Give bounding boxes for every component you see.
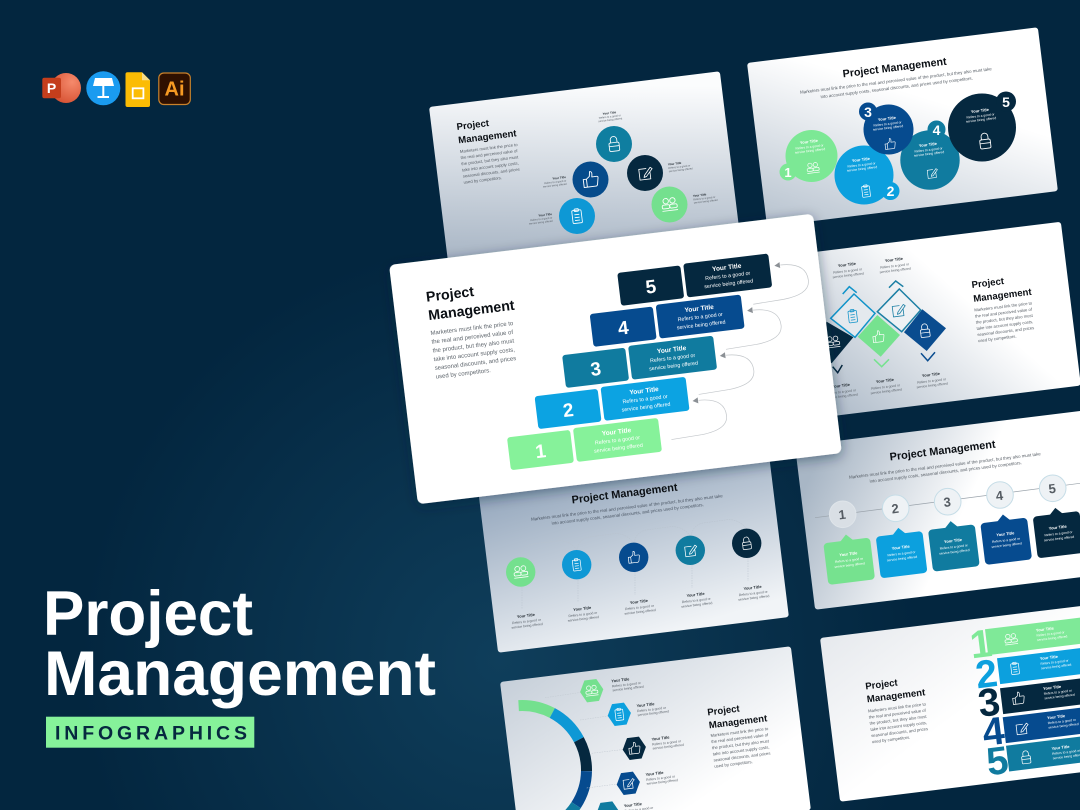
bubble 3: service being offered (873, 124, 904, 132)
step 3: Refers to a good or (650, 353, 696, 364)
circle: lock (732, 529, 761, 558)
callout card 4: Refers to a good or (992, 536, 1021, 544)
bar 1: Your Title (1036, 625, 1055, 633)
timeline line (815, 483, 1080, 518)
bubble 1: Your Title (800, 138, 819, 145)
heading: main slide: Management (427, 298, 516, 324)
text block: slide F: take into account supply costs, (712, 745, 770, 756)
heading: slide C (971, 273, 1033, 305)
step 1: service being offered (594, 443, 643, 455)
text block: slide B: Marketers must link the price to the real and perceived value of the product, but they also must take (800, 66, 992, 95)
step 3: service being offered (649, 361, 698, 372)
icon: Google Slides (126, 72, 150, 107)
labels: slide E: Refers to a good or (512, 618, 542, 625)
bar 2: Refers to a good or (1040, 658, 1070, 666)
bar 1: Refers to a good or (1036, 630, 1066, 638)
step 3: Your Title (657, 345, 687, 355)
text block: slide C: the product, but they also must (976, 313, 1034, 325)
badge: infographics (46, 717, 254, 748)
circle: edit (627, 155, 663, 191)
circle: lock (596, 126, 632, 162)
labels: slide C: Your Title (876, 377, 895, 384)
text block: main slide: take into account supply costs, (433, 347, 516, 363)
labels: slide F: service being offered (652, 743, 684, 751)
panel: five circles slide (478, 453, 789, 653)
bubble 1 (780, 130, 838, 182)
text block: slide A: used by competitors. (463, 175, 502, 185)
labels: slide F (611, 675, 684, 810)
bar 5 (984, 730, 1080, 784)
step 1: Your Title (602, 427, 632, 438)
step 5: Refers to a good or (705, 271, 751, 282)
labels: slide F: Your Title (651, 734, 671, 742)
dashed connectors (521, 520, 748, 609)
labels: slide A: Refers to a good or (530, 215, 553, 222)
bubble 3: Refers to a good or (873, 120, 903, 128)
panel: bubbles slide top right (747, 27, 1058, 227)
bubble 1: service being offered (795, 147, 826, 155)
labels: slide A: Refers to a good or (599, 113, 621, 120)
bubble 5: 5 (1002, 94, 1010, 110)
heading: slide A: Management (458, 128, 518, 146)
labels: slide C: service being offered (832, 272, 864, 279)
labels: slide C: service being offered (826, 393, 858, 400)
step 2: service being offered (621, 402, 671, 414)
bar 4: service being offered (1048, 722, 1079, 730)
icon: Illustrator: Ai (164, 78, 184, 100)
labels: slide E: Refers to a good or (625, 604, 655, 611)
text block: slide A (460, 142, 522, 185)
callout card 3 (927, 518, 980, 572)
step numbers: 5 (1048, 481, 1057, 496)
labels: slide A: Your Title (693, 192, 707, 198)
heading: slide F: Management (708, 713, 769, 731)
step 5: service being offered (704, 278, 754, 290)
bar 2: service being offered (1041, 663, 1072, 670)
panel: diamonds slide (770, 222, 1080, 421)
bar 1 (968, 613, 1080, 667)
title: Management (44, 639, 436, 709)
labels: slide F: Refers to a good or (637, 706, 667, 713)
labels: slide A: service being offered (598, 116, 623, 123)
text block: slide G: take into account supply costs, (870, 720, 927, 732)
text block: main slide: seasonal discounts, and prices (434, 356, 517, 372)
labels: slide E: Refers to a good or (568, 611, 598, 618)
text block: slide E: Marketers must link the price to the real and perceived value of the product, but they also must take (531, 493, 723, 522)
labels: slide F: Refers to a good or (612, 681, 642, 688)
heading: main slide: Project (425, 284, 475, 306)
labels: slide F: Your Title (645, 770, 665, 777)
step 5 (617, 253, 772, 306)
hexagon: thumb (621, 736, 647, 761)
arrow 1 to 2 (667, 394, 729, 440)
bar 5: 5 (984, 739, 1011, 784)
labels: slide C: Refers to a good or (871, 383, 901, 391)
callout card 4: Your Title (996, 530, 1015, 537)
step 1: Refers to a good or (595, 435, 641, 447)
icon: Illustrator (159, 73, 190, 104)
icon: PowerPoint: P (47, 80, 56, 96)
labels: slide E: Your Title (743, 584, 763, 591)
labels: slide C: Your Title (832, 382, 851, 389)
labels: slide A: service being offered (693, 198, 718, 205)
circle: users (506, 557, 535, 587)
callout card 3: service being offered (939, 548, 970, 556)
text block: slide D: into account supply costs, seasonal discounts, and prices used by competitors. (869, 460, 1022, 484)
text block: slide G: Marketers must link the price to (868, 701, 927, 713)
step circles (829, 475, 1066, 528)
heading: slide C: Project (971, 276, 1005, 291)
step 4: 4 (617, 318, 630, 340)
hexagon: lock (595, 801, 621, 810)
bar 4: Your Title (1047, 713, 1066, 720)
labels: slide E: Your Title (630, 598, 649, 605)
circle: thumb (572, 162, 608, 198)
circle: edit (676, 536, 705, 565)
step numbers (838, 481, 1057, 522)
callout card 5: Refers to a good or (1044, 530, 1074, 537)
arrow 4 to 5 (749, 259, 810, 304)
text block: slide G: used by competitors. (872, 735, 911, 744)
text block: slide F: seasonal discounts, and prices (713, 751, 771, 763)
labels: slide A: service being offered (668, 166, 693, 173)
labels: slide C: Your Title (885, 256, 904, 263)
labels: slide A: Your Title (538, 212, 552, 218)
callout card 4 (980, 512, 1032, 565)
callout card 5: Your Title (1048, 524, 1068, 531)
hexagon: edit (615, 771, 641, 796)
step numbers: 4 (995, 488, 1005, 503)
heading: slide G (865, 674, 927, 705)
text block: slide C: the real and perceived value of (975, 307, 1033, 319)
labels: slide F: service being offered (612, 685, 644, 692)
heading: slide G: Project (865, 677, 899, 692)
step numbers: 2 (891, 501, 900, 516)
bubble 4: service being offered (914, 150, 945, 158)
badge: infographics: INFOGRAPHICS (55, 722, 247, 744)
labels: slide E: service being offered (738, 594, 770, 602)
text block: slide F: the real and perceived value of (711, 732, 769, 744)
text block: slide A: Marketers must link the price to (460, 142, 519, 154)
text block: slide G (868, 701, 931, 744)
bubble 4: 4 (933, 122, 941, 138)
title: Project (43, 579, 253, 649)
bar 3 (976, 672, 1080, 726)
text block: slide A: seasonal discounts, and prices (463, 167, 520, 179)
labels: slide E (510, 583, 770, 630)
labels: slide C: service being offered (870, 388, 902, 395)
diamond: edit (877, 281, 921, 332)
labels: slide A: Your Title (552, 175, 566, 181)
step 1 (507, 418, 662, 470)
labels: slide A: Refers to a good or (668, 163, 691, 170)
bubble 5 (948, 92, 1016, 162)
step 3 (562, 336, 717, 388)
text block: main slide (430, 321, 520, 381)
step 4: Refers to a good or (677, 312, 723, 323)
heading: slide C: Management (973, 287, 1033, 305)
panel: main staircase slide (389, 214, 842, 504)
step 5: Your Title (712, 263, 742, 273)
text block: slide E: into account supply costs, seasonal discounts, and prices used by competitors. (551, 502, 704, 526)
bar 2: Your Title (1040, 654, 1059, 661)
text block: slide C: take into account supply costs, (976, 319, 1033, 331)
labels: slide E: service being offered (511, 622, 543, 630)
labels: slide F: Your Title (624, 801, 643, 808)
step numbers: 3 (943, 494, 952, 510)
heading: slide D: Project Management (889, 439, 997, 463)
callout card 3: Refers to a good or (940, 543, 969, 551)
bubble 2: Your Title (852, 156, 871, 163)
heading: slide B: Project Management (842, 56, 948, 80)
circle: thumb (619, 543, 648, 572)
text block: slide C: Marketers must link the price to (974, 300, 1033, 312)
labels: slide C: Your Title (838, 261, 857, 268)
text block: main slide: the product, but they also must (432, 339, 515, 354)
bar 4 (980, 701, 1080, 755)
hexagon: clipboard (606, 702, 632, 727)
labels: slide C: Refers to a good or (833, 267, 863, 275)
step 1: 1 (534, 441, 548, 463)
diamond: users (811, 322, 853, 373)
text block: slide F: Marketers must link the price to (710, 726, 769, 738)
labels: slide C: Refers to a good or (917, 377, 947, 385)
labels: slide A: Refers to a good or (544, 178, 567, 185)
heading: slide F: Project (707, 703, 741, 718)
bar 2 (973, 642, 1080, 697)
labels: slide F: Refers to a good or (652, 739, 682, 747)
step 4: Your Title (684, 304, 715, 314)
step 5: 5 (644, 277, 658, 299)
bubble 3: 3 (864, 104, 872, 120)
labels: slide C: service being offered (916, 382, 948, 389)
bar 5: Refers to a good or (1052, 748, 1080, 756)
bubble 5: Your Title (971, 107, 990, 114)
labels: slide C: Your Title (922, 371, 941, 378)
heading: slide E: Project Management (571, 482, 679, 506)
bar 3: 3 (976, 680, 1003, 726)
heading: slide G: Management (866, 687, 927, 705)
diamond: clipboard (831, 287, 875, 337)
bubble 5: service being offered (966, 116, 997, 124)
text block: main slide: used by competitors. (436, 368, 492, 381)
bubble 1: Refers to a good or (795, 143, 825, 151)
bubble 2: 2 (887, 183, 895, 199)
heading: slide A (456, 115, 518, 146)
step 3: 3 (589, 359, 602, 381)
bar 1: 1 (968, 622, 994, 667)
step numbers: 1 (838, 507, 847, 522)
labels: slide E: service being offered (681, 601, 713, 609)
bar 4: Refers to a good or (1048, 718, 1077, 725)
labels: slide E: service being offered (624, 608, 656, 616)
labels: slide A: Refers to a good or (693, 195, 716, 201)
bar 3: service being offered (1044, 693, 1075, 700)
circle: clipboard (559, 198, 595, 234)
text block: slide G: seasonal discounts, and prices (871, 726, 928, 738)
callout card 2: service being offered (887, 555, 918, 562)
text block: slide A: take into account supply costs, (462, 161, 519, 172)
bubble 4: Your Title (919, 141, 938, 148)
panel: numbered bars slide (820, 602, 1080, 802)
labels: slide F: service being offered (637, 709, 669, 717)
labels: slide A: Your Title (602, 110, 617, 116)
diamond: thumb (858, 315, 900, 367)
labels: slide F: Your Title (611, 676, 630, 683)
labels: slide A: Your Title (668, 161, 682, 166)
text block: main slide: Marketers must link the price to (430, 321, 514, 337)
bar 3: Refers to a good or (1044, 688, 1073, 696)
labels: slide E: Your Title (686, 591, 706, 598)
labels: slide A: service being offered (529, 219, 553, 226)
heading: main slide (425, 279, 516, 324)
heading: slide F (707, 700, 769, 731)
text block: slide C (974, 300, 1037, 343)
bubble 2: Refers to a good or (847, 161, 877, 169)
circle: users (652, 186, 688, 222)
text block: slide D: Marketers must link the price to the real and perceived value of the product, but they also must take (849, 451, 1041, 480)
bar 1: service being offered (1037, 634, 1068, 642)
labels: slide E: service being offered (568, 615, 599, 623)
callout card 1: Your Title (839, 550, 858, 557)
callout card 2: Your Title (891, 544, 911, 551)
labels: slide E: Your Title (573, 605, 592, 612)
hexagon: users (579, 678, 605, 703)
bubble 3: Your Title (878, 115, 897, 122)
text block: main slide: the real and perceived value of (431, 330, 514, 346)
labels: slide C: Refers to a good or (827, 388, 857, 396)
text block: slide F: the product, but they also must (712, 738, 770, 750)
text block: slide A: the product, but they also must (461, 154, 519, 166)
labels: slide E: Refers to a good or (682, 597, 712, 604)
panel: circles slide top left (429, 71, 740, 271)
bubble 5: Refers to a good or (966, 112, 996, 120)
title (43, 579, 436, 709)
icon: Keynote (86, 71, 120, 105)
bar 2: 2 (973, 652, 1000, 697)
text block: slide C: seasonal discounts, and prices (977, 325, 1034, 337)
callout card 3: Your Title (944, 537, 963, 544)
bubble 2 (834, 146, 900, 204)
bar 4: 4 (980, 709, 1007, 755)
text block: slide A: the real and perceived value of (460, 148, 519, 160)
text block: slide G: the product, but they also must (869, 714, 928, 726)
text block: slide G: the real and perceived value of (869, 708, 927, 720)
labels: slide F: Refers to a good or (646, 774, 676, 782)
text block: slide F: used by competitors. (714, 759, 753, 769)
labels: slide A (528, 109, 718, 226)
bubble 4: Refers to a good or (914, 146, 944, 154)
callout card 1: Refers to a good or (835, 556, 864, 564)
heading: slide A: Project (456, 118, 490, 133)
bubble 1: 1 (784, 165, 792, 180)
labels: slide A: service being offered (543, 182, 567, 189)
circle: clipboard (562, 550, 591, 579)
panel: timeline slide (795, 410, 1080, 610)
icon: PowerPoint (42, 73, 81, 103)
labels: slide C: Refers to a good or (880, 262, 910, 270)
labels: slide E: Refers to a good or (739, 590, 769, 597)
diamond: lock (904, 309, 946, 361)
callout card 4: service being offered (991, 541, 1022, 549)
step 4: service being offered (676, 319, 726, 331)
step 2: 2 (562, 400, 575, 422)
text block: slide F (710, 726, 773, 769)
callout card 5 (1032, 505, 1080, 558)
callout card 1 (823, 532, 875, 585)
labels: slide C (825, 255, 948, 400)
callout card 1: service being offered (834, 561, 865, 569)
step 4 (590, 295, 745, 347)
labels: slide E: Your Title (517, 612, 536, 619)
panel: ring slide (500, 646, 811, 810)
callout card 5: service being offered (1044, 535, 1075, 542)
text block: slide C: used by competitors. (978, 334, 1017, 343)
step 2 (534, 377, 690, 429)
arrow 3 to 4 (721, 304, 783, 349)
text block: slide B: into account supply costs, seasonal discounts, and prices used by competitors. (820, 76, 973, 99)
bar 3: Your Title (1043, 684, 1062, 691)
callout card 2: Refers to a good or (887, 550, 917, 557)
step 2: Refers to a good or (622, 394, 668, 405)
labels: slide F: service being offered (646, 778, 678, 786)
bubble 4 (900, 120, 960, 190)
bubble 3 (859, 102, 914, 154)
callout card 2 (875, 525, 927, 578)
ring chart (519, 706, 587, 810)
labels: slide C: service being offered (879, 267, 911, 274)
labels: slide F: Your Title (636, 701, 656, 708)
dashed connectors (545, 692, 623, 788)
bubble 2: service being offered (847, 165, 878, 173)
bar 5: Your Title (1051, 744, 1071, 751)
step 2: Your Title (629, 386, 659, 397)
arrow 2 to 3 (694, 349, 756, 394)
